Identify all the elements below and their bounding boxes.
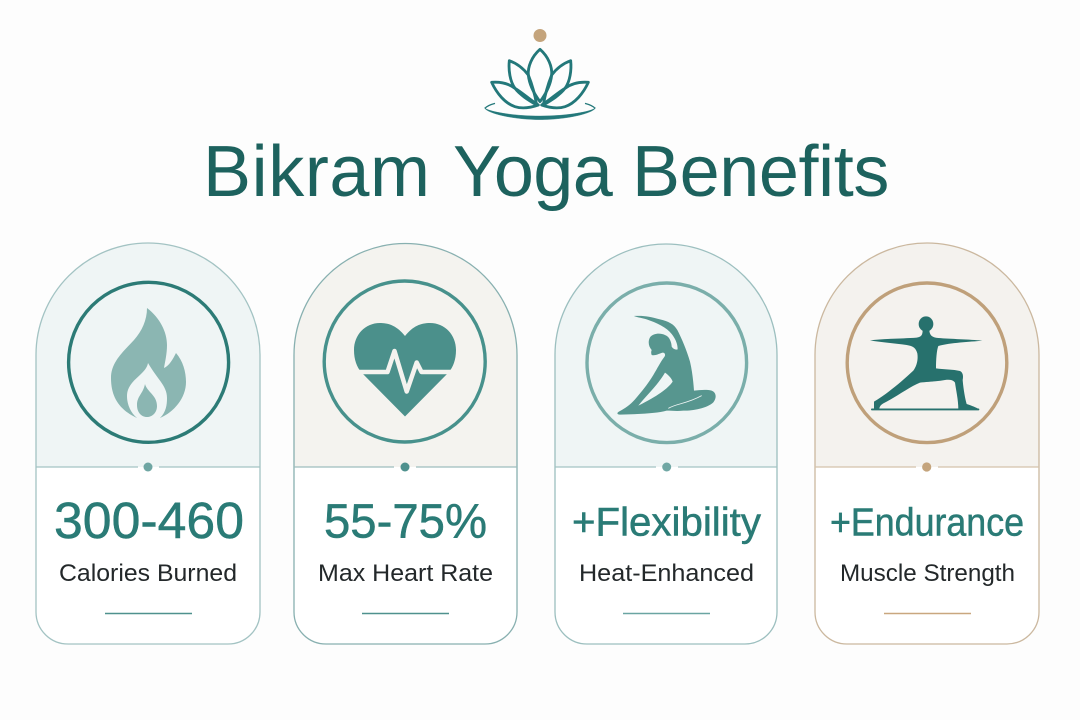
title: Yoga xyxy=(453,132,614,212)
panel: endurance xyxy=(815,243,1039,644)
label: heat-enhanced: Heat-Enhanced xyxy=(579,560,754,587)
icon: heart with pulse xyxy=(352,323,458,416)
title: Bikram xyxy=(203,132,431,212)
panel: max heart rate xyxy=(294,244,517,644)
label: max heart rate: Max Heart Rate xyxy=(318,560,493,587)
icon: flame xyxy=(111,308,186,418)
stat: 55-75%: 55-75% xyxy=(324,496,487,548)
icon: lotus logo xyxy=(484,29,596,120)
icon: warrior pose figure xyxy=(870,316,982,410)
panel: calories burned xyxy=(36,243,260,644)
stat: 300-460: 300-460 xyxy=(54,492,244,549)
panel: flexibility xyxy=(555,244,777,644)
label: calories burned: Calories Burned xyxy=(59,560,237,587)
label: muscle strength: Muscle Strength xyxy=(840,560,1015,587)
title: Benefits xyxy=(632,132,889,212)
stat: +Flexibility: +Flexibility xyxy=(572,500,761,544)
icon: seated side-bend figure xyxy=(617,316,716,415)
stat: +Endurance: +Endurance xyxy=(830,502,1024,544)
